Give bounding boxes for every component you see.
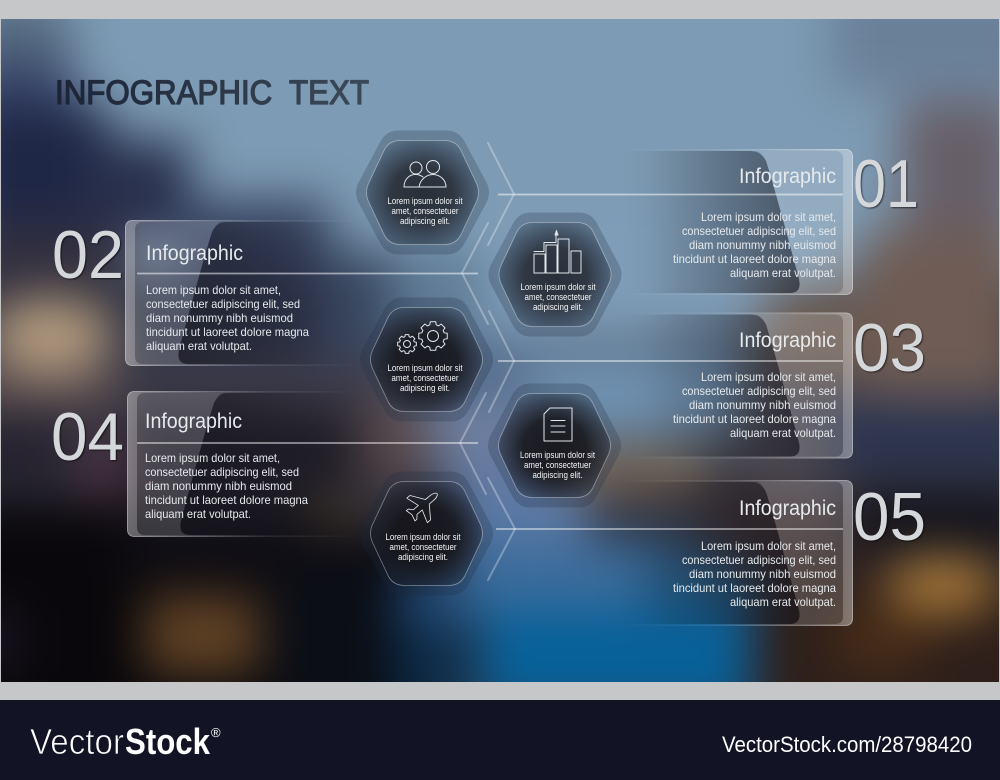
body text 01: consectetuer adipiscing elit, sed xyxy=(682,224,836,238)
body text 02: Lorem ipsum dolor sit amet, xyxy=(146,283,281,297)
heading 03: Infographic xyxy=(739,329,836,352)
body text 02: diam nonummy nibh euismod xyxy=(146,311,293,325)
body text 02: tincidunt ut laoreet dolore magna xyxy=(146,325,309,339)
number 04: 04 xyxy=(51,399,124,475)
body text 03: Lorem ipsum dolor sit amet, xyxy=(701,370,836,384)
number 01: 01 xyxy=(853,146,919,222)
hexagon 5: airplane xyxy=(360,472,493,596)
hexagon 1 text: adipiscing elit. xyxy=(400,216,450,226)
panel 04 xyxy=(51,391,360,537)
number 05: 05 xyxy=(853,479,926,555)
body text 05 xyxy=(673,539,836,609)
heading 05: Infographic xyxy=(739,497,836,520)
hexagon 3 text xyxy=(388,363,463,393)
hexagon 4 text xyxy=(520,450,595,480)
body text 03 xyxy=(673,370,836,440)
hexagon 3 text: adipiscing elit. xyxy=(400,383,450,393)
body text 03: aliquam erat volutpat. xyxy=(730,426,836,440)
body text 04: diam nonummy nibh euismod xyxy=(145,479,292,493)
panel 03 xyxy=(620,310,926,458)
icon: people xyxy=(404,160,446,187)
icon: bar chart with arrow xyxy=(534,230,581,273)
body text 01: tincidunt ut laoreet dolore magna xyxy=(673,252,836,266)
number 03: 03 xyxy=(853,310,926,386)
hexagon 3 text: amet, consectetuer xyxy=(392,373,459,383)
icon: airplane xyxy=(400,481,447,528)
title: INFOGRAPHIC TEXT xyxy=(55,74,369,112)
body text 01 xyxy=(673,210,836,280)
footer bar xyxy=(0,700,1000,780)
body text 05: tincidunt ut laoreet dolore magna xyxy=(673,581,836,595)
hexagon 5 text: amet, consectetuer xyxy=(390,542,457,552)
hexagon 2 text xyxy=(520,282,596,312)
hexagon 2 text: adipiscing elit. xyxy=(533,302,583,312)
footer logo: ® xyxy=(211,725,221,740)
icon: gears xyxy=(398,322,447,353)
body text 04: aliquam erat volutpat. xyxy=(145,507,251,521)
body text 04 xyxy=(145,451,308,521)
hexagon 1 text: amet, consectetuer xyxy=(392,206,459,216)
connector lines and chevrons xyxy=(137,143,843,580)
hexagon 4 text: Lorem ipsum dolor sit xyxy=(520,450,595,460)
footer logo: Stock xyxy=(125,721,211,762)
body text 04: Lorem ipsum dolor sit amet, xyxy=(145,451,280,465)
panel 02 xyxy=(52,217,358,366)
body text 05: consectetuer adipiscing elit, sed xyxy=(682,553,836,567)
heading 02: Infographic xyxy=(146,242,243,265)
panel 05 xyxy=(620,479,926,626)
body text 04: tincidunt ut laoreet dolore magna xyxy=(145,493,308,507)
body text 03: tincidunt ut laoreet dolore magna xyxy=(673,412,836,426)
body text 04: consectetuer adipiscing elit, sed xyxy=(145,465,299,479)
hexagon 5 text xyxy=(386,532,461,562)
panel 01 xyxy=(620,146,919,295)
number 02: 02 xyxy=(52,217,124,293)
icon: document xyxy=(544,408,572,441)
footer image id: VectorStock.com/28798420 xyxy=(722,732,972,757)
body text 03: diam nonummy nibh euismod xyxy=(689,398,836,412)
hexagon 4: document xyxy=(488,384,621,508)
hexagon 2 text: Lorem ipsum dolor sit xyxy=(520,282,596,292)
hexagon 2 text: amet, consectetuer xyxy=(524,292,592,302)
footer logo xyxy=(30,721,221,762)
body text 01: aliquam erat volutpat. xyxy=(730,266,836,280)
body text 02: aliquam erat volutpat. xyxy=(146,339,252,353)
body text 01: diam nonummy nibh euismod xyxy=(689,238,836,252)
heading 04: Infographic xyxy=(145,410,242,433)
hexagon 1 text: Lorem ipsum dolor sit xyxy=(388,196,463,206)
body text 03: consectetuer adipiscing elit, sed xyxy=(682,384,836,398)
hexagon 3: gears xyxy=(360,298,493,422)
hexagon 5 text: adipiscing elit. xyxy=(398,552,448,562)
heading 01: Infographic xyxy=(739,165,836,188)
body text 02: consectetuer adipiscing elit, sed xyxy=(146,297,300,311)
hexagon 1: people xyxy=(356,130,489,254)
hexagon 1 text xyxy=(388,196,463,226)
hexagon 4 text: adipiscing elit. xyxy=(532,470,582,480)
body text 02 xyxy=(146,283,309,353)
hexagon 4 text: amet, consectetuer xyxy=(524,460,591,470)
body text 01: Lorem ipsum dolor sit amet, xyxy=(701,210,836,224)
hexagon 2: bar chart xyxy=(488,212,622,336)
hexagon 5 text: Lorem ipsum dolor sit xyxy=(386,532,461,542)
hexagon 3 text: Lorem ipsum dolor sit xyxy=(388,363,463,373)
body text 05: diam nonummy nibh euismod xyxy=(689,567,836,581)
body text 05: aliquam erat volutpat. xyxy=(730,595,836,609)
body text 05: Lorem ipsum dolor sit amet, xyxy=(701,539,836,553)
footer logo: Vector xyxy=(30,721,124,762)
